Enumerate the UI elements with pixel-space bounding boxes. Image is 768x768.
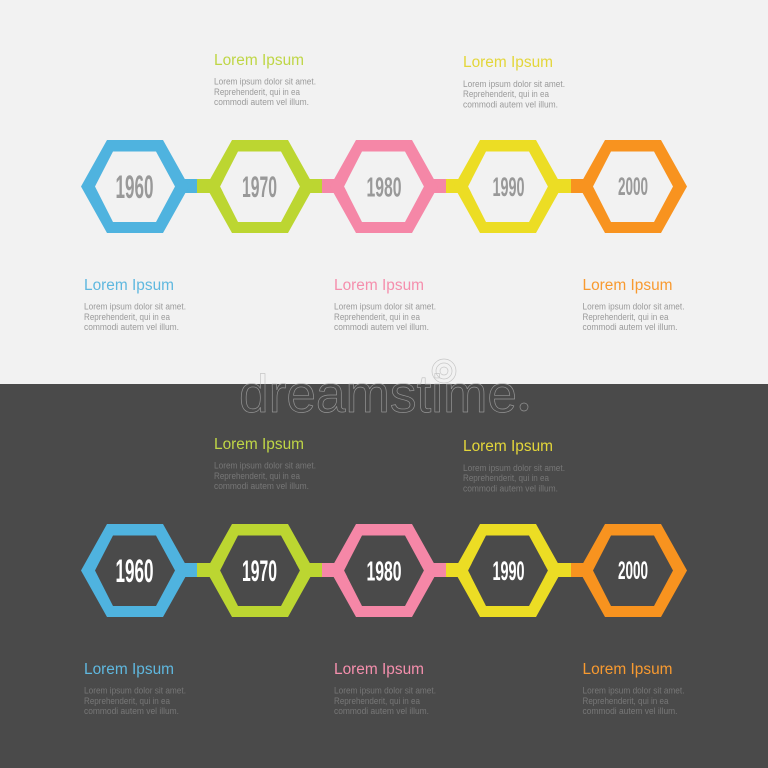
text block: 1970 top: commodi autem vel illum. [214, 97, 309, 107]
text block: 2000 bottom [582, 277, 684, 332]
text block: 1980 bottom: Reprehenderit, qui in ea [334, 696, 420, 706]
text block: 2000 bottom: Lorem Ipsum [582, 661, 672, 678]
hexagon: 1990 [454, 524, 562, 617]
text block: 2000 bottom [582, 661, 684, 716]
connector: orange [571, 179, 591, 193]
text block: 1980 bottom: commodi autem vel illum. [334, 322, 429, 332]
text block: 1990 top [463, 438, 565, 494]
inner fill: pink hexagon [344, 536, 424, 606]
text block: 1990 top: Lorem Ipsum [463, 438, 553, 455]
connector: green [197, 563, 322, 577]
text block: 1990 top: Lorem ipsum dolor sit amet. [463, 463, 565, 473]
text block: 1980 bottom: Lorem Ipsum [334, 277, 424, 294]
panel: light timeline [0, 0, 768, 384]
text block: 1980 bottom: commodi autem vel illum. [334, 706, 429, 716]
connector: blue [180, 563, 197, 577]
text block: 1980 bottom: Lorem ipsum dolor sit amet. [334, 302, 436, 312]
text block: 1990 top: Lorem ipsum dolor sit amet. [463, 79, 565, 89]
text block: 1970 top: Reprehenderit, qui in ea [214, 87, 300, 97]
hexagon: 1990 [454, 140, 562, 233]
text block: 1980 bottom [334, 277, 436, 332]
text block: 1990 top: commodi autem vel illum. [463, 484, 558, 494]
hexagon: 2000 [579, 524, 687, 617]
hexagon: 2000 [579, 140, 687, 233]
hexagon: 1960 [81, 140, 189, 233]
hexagon: 1970 [206, 524, 314, 617]
text block: 2000 bottom: commodi autem vel illum. [582, 706, 678, 716]
text block: 1970 top: Lorem Ipsum [214, 52, 304, 69]
hexagon: 1960 [81, 524, 189, 617]
text block: 1960 bottom: commodi autem vel illum. [84, 322, 179, 332]
hexagon: 1990: 1990 [492, 172, 524, 202]
text block: 1980 bottom: Reprehenderit, qui in ea [334, 312, 420, 322]
text block: 1980 bottom: Lorem Ipsum [334, 661, 424, 678]
hexagon: 1990: 1990 [492, 556, 524, 586]
icon: watermark spiral [432, 359, 456, 383]
text block: 1960 bottom: Reprehenderit, qui in ea [84, 696, 170, 706]
text block: 1960 bottom [84, 277, 186, 332]
hexagon: 2000: 2000 [618, 173, 648, 201]
connector: pink [322, 179, 446, 193]
text block: 1990 top: Lorem Ipsum [463, 54, 553, 71]
text block: 1960 bottom: Lorem ipsum dolor sit amet. [84, 302, 186, 312]
text block: 1960 bottom [84, 661, 186, 716]
hexagon: 1960: 1960 [116, 553, 154, 589]
hexagon: 2000: 2000 [618, 557, 648, 585]
text block: 1970 top: Reprehenderit, qui in ea [214, 471, 300, 481]
text block: 1970 top: Lorem Ipsum [214, 436, 304, 453]
connector: pink [322, 563, 446, 577]
inner fill: green hexagon [220, 536, 300, 606]
text block: 1960 bottom: Lorem Ipsum [84, 661, 174, 678]
text block: 1970 top: Lorem ipsum dolor sit amet. [214, 460, 316, 470]
text block: 1990 top: commodi autem vel illum. [463, 100, 558, 110]
text block: 1960 bottom: Lorem ipsum dolor sit amet. [84, 686, 186, 696]
hexagon: 1970: 1970 [242, 171, 277, 204]
text block: 2000 bottom: Reprehenderit, qui in ea [582, 312, 669, 322]
hexagon: 1960: 1960 [116, 169, 154, 205]
text block: 1960 bottom: commodi autem vel illum. [84, 706, 179, 716]
text block: 2000 bottom: Reprehenderit, qui in ea [582, 696, 669, 706]
connector: yellow [446, 563, 571, 577]
connector: blue [180, 179, 197, 193]
panel: dark timeline [0, 384, 768, 768]
hexagon: 1980: 1980 [366, 172, 402, 202]
text block: 2000 bottom: Lorem ipsum dolor sit amet. [582, 686, 684, 696]
inner fill: green hexagon [220, 152, 300, 222]
connector: yellow [446, 179, 571, 193]
inner fill: yellow hexagon [468, 536, 548, 606]
connector: green [197, 179, 322, 193]
connector: orange [571, 563, 591, 577]
text block: 1970 top: Lorem ipsum dolor sit amet. [214, 76, 316, 86]
text block: 1970 top [214, 436, 316, 491]
text block: 1970 top [214, 52, 316, 107]
text block: 1990 top: Reprehenderit, qui in ea [463, 89, 549, 99]
text block: 1980 bottom: Lorem ipsum dolor sit amet. [334, 686, 436, 696]
watermark: dreamstime [239, 365, 517, 424]
text block: 1980 bottom [334, 661, 436, 716]
hexagon: 1980 [330, 140, 438, 233]
inner fill: yellow hexagon [468, 152, 548, 222]
hexagon: 1980: 1980 [366, 556, 402, 586]
text block: 2000 bottom: commodi autem vel illum. [582, 322, 678, 332]
hexagon: 1970 [206, 140, 314, 233]
text block: 1990 top [463, 54, 565, 110]
text block: 2000 bottom: Lorem ipsum dolor sit amet. [582, 302, 684, 312]
text block: 1990 top: Reprehenderit, qui in ea [463, 473, 549, 483]
icon: registered mark [520, 403, 528, 411]
inner fill: pink hexagon [344, 152, 424, 222]
hexagon: 1980 [330, 524, 438, 617]
text block: 1970 top: commodi autem vel illum. [214, 481, 309, 491]
text block: 1960 bottom: Reprehenderit, qui in ea [84, 312, 170, 322]
text block: 2000 bottom: Lorem Ipsum [582, 277, 672, 294]
hexagon: 1970: 1970 [242, 555, 277, 588]
text block: 1960 bottom: Lorem Ipsum [84, 277, 174, 294]
